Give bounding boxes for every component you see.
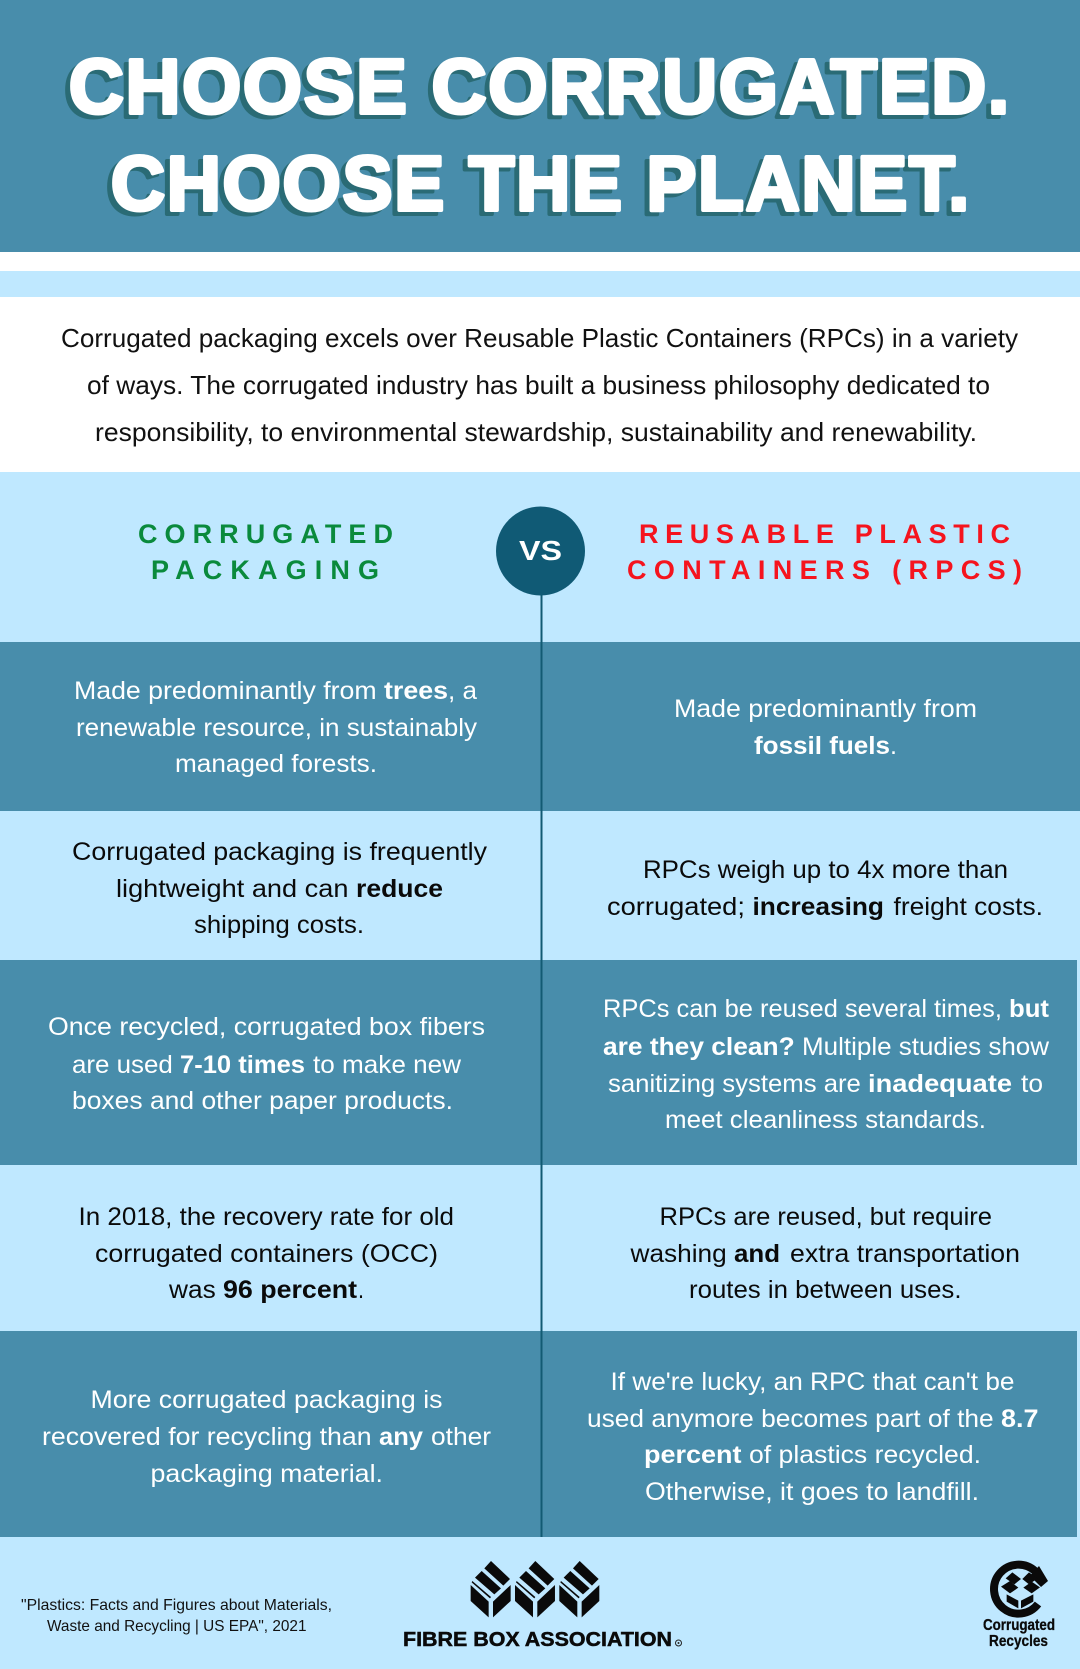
title text: CHOOSE CORRUGATED. <box>64 48 1006 134</box>
title banner <box>0 0 1080 252</box>
row 3 right text: meet cleanliness standards. <box>665 1106 986 1134</box>
row 1 right text: . <box>890 732 897 760</box>
heading: corrugated packaging: CORRUGATED <box>138 519 393 549</box>
row 2 right text: increasing <box>752 893 884 921</box>
source citation <box>21 1597 332 1635</box>
row 2 left text: lightweight and can <box>116 875 356 903</box>
row 5 left text: recovered for recycling than <box>42 1423 379 1451</box>
row 5 left text: any <box>379 1423 423 1451</box>
row 4 right text: washing <box>629 1240 734 1268</box>
row 2 left text: reduce <box>356 875 443 903</box>
row 4 left text: was <box>168 1276 223 1304</box>
row 3 left text <box>48 1013 485 1115</box>
row 4 left text: . <box>358 1276 364 1304</box>
row 5 right text: 8.7 <box>1001 1405 1038 1433</box>
row 4 right text <box>629 1203 1020 1304</box>
row 3 right text: Multiple studies show <box>802 1033 1050 1061</box>
heading: reusable plastic containers <box>627 519 1022 585</box>
row 2 right text <box>607 856 1043 921</box>
icon: three boxes <box>471 1561 599 1617</box>
row 5 right text: used anymore becomes part of the <box>587 1405 1001 1433</box>
center divider line <box>540 590 542 1537</box>
row 4 left text: 96 percent <box>223 1276 358 1304</box>
row 2 left text: Corrugated packaging is frequently <box>72 838 488 866</box>
row 3 left text: 7-10 times <box>180 1051 305 1079</box>
logo: corrugated recycles: Corrugated <box>983 1617 1055 1634</box>
row 3 background <box>0 960 1077 1165</box>
row 4 left text: In 2018, the recovery rate for old <box>78 1203 454 1231</box>
intro panel <box>0 297 1080 472</box>
row 4 left text <box>78 1203 454 1304</box>
heading: reusable plastic containers: REUSABLE PLASTIC <box>639 519 1010 549</box>
logo: fibre box association <box>403 1561 682 1651</box>
title text: CHOOSE THE PLANET. <box>111 141 971 227</box>
row 1 right text: Made predominantly from <box>674 695 977 723</box>
registered mark <box>676 1640 682 1646</box>
source citation: "Plastics: Facts and Figures about Materials, <box>21 1597 332 1614</box>
row 3 right text: but <box>1009 995 1050 1023</box>
title text <box>64 44 1011 231</box>
title text: CHOOSE CORRUGATED. <box>69 44 1011 130</box>
row 1 right text: fossil fuels <box>754 732 890 760</box>
row 3 left text: Once recycled, corrugated box fibers <box>48 1013 485 1041</box>
row 4 right text: routes in between uses. <box>689 1276 962 1304</box>
row 1 background <box>0 642 1080 811</box>
row 5 right text: Otherwise, it goes to landfill. <box>645 1478 979 1506</box>
row 1 left text: Made predominantly from <box>74 677 384 705</box>
vs badge: VS <box>519 535 562 566</box>
intro panel: of ways. The corrugated industry has built a business philosophy dedicated to <box>87 370 990 400</box>
heading: corrugated packaging: PACKAGING <box>151 555 379 585</box>
row 3 right text: inadequate <box>868 1070 1012 1098</box>
heading: reusable plastic containers: CONTAINERS (RPCS) <box>627 555 1022 585</box>
row 2 left text <box>72 838 488 939</box>
row 3 right text <box>603 995 1050 1134</box>
heading: corrugated packaging <box>138 519 393 585</box>
row 1 left text: trees <box>384 677 448 705</box>
row 3 right text: to <box>1021 1070 1043 1098</box>
white and blue separator strips <box>0 252 1080 297</box>
row 5 left text: More corrugated packaging is <box>90 1386 442 1414</box>
intro panel: Corrugated packaging excels over Reusable Plastic Containers (RPCs) in a variety <box>61 323 1018 353</box>
row 5 background <box>0 1331 1077 1537</box>
row 2 right text: RPCs weigh up to 4x more than <box>643 856 1008 884</box>
logo: corrugated recycles: Recycles <box>989 1633 1048 1650</box>
intro panel: responsibility, to environmental stewardship, sustainability and renewability. <box>95 417 977 447</box>
row 3 right text: are they clean? <box>603 1033 802 1061</box>
row 3 left text: are used <box>72 1051 180 1079</box>
row 3 left text: boxes and other paper products. <box>72 1087 453 1115</box>
logo: corrugated recycles <box>983 1565 1055 1650</box>
title text: CHOOSE THE PLANET. <box>106 145 966 231</box>
row 4 left text: corrugated containers (OCC) <box>95 1240 438 1268</box>
row 3 right text: sanitizing systems are <box>608 1070 868 1098</box>
row 4 right text: extra transportation <box>790 1240 1020 1268</box>
source citation: Waste and Recycling | US EPA", 2021 <box>47 1618 307 1635</box>
row 2 right text: freight costs. <box>894 893 1043 921</box>
row 4 right text: and <box>734 1240 780 1268</box>
row 3 right text: RPCs can be reused several times, <box>603 995 1009 1023</box>
vs badge <box>496 506 585 596</box>
row 1 left text: managed forests. <box>175 750 377 778</box>
row 5 left text: other <box>431 1423 491 1451</box>
row 4 right text: RPCs are reused, but require <box>660 1203 992 1231</box>
row 5 right text: percent <box>644 1441 749 1469</box>
row 5 left text: packaging material. <box>150 1460 383 1488</box>
row 1 left text: , a <box>448 677 477 705</box>
row 1 right text <box>674 695 977 760</box>
row 5 right text: If we're lucky, an RPC that can't be <box>610 1368 1014 1396</box>
logo: fibre box association: FIBRE BOX ASSOCIATION <box>403 1629 672 1651</box>
row 5 right text: of plastics recycled. <box>749 1441 981 1469</box>
row 2 left text: shipping costs. <box>194 911 364 939</box>
row 1 left text <box>74 677 478 778</box>
row 1 left text: renewable resource, in sustainably <box>76 714 478 742</box>
row 2 right text: corrugated; <box>607 893 752 921</box>
row 3 left text: to make new <box>313 1051 462 1079</box>
icon: recycling ring with box <box>994 1565 1048 1614</box>
row 5 right text <box>587 1368 1038 1506</box>
row 5 left text <box>42 1386 491 1488</box>
